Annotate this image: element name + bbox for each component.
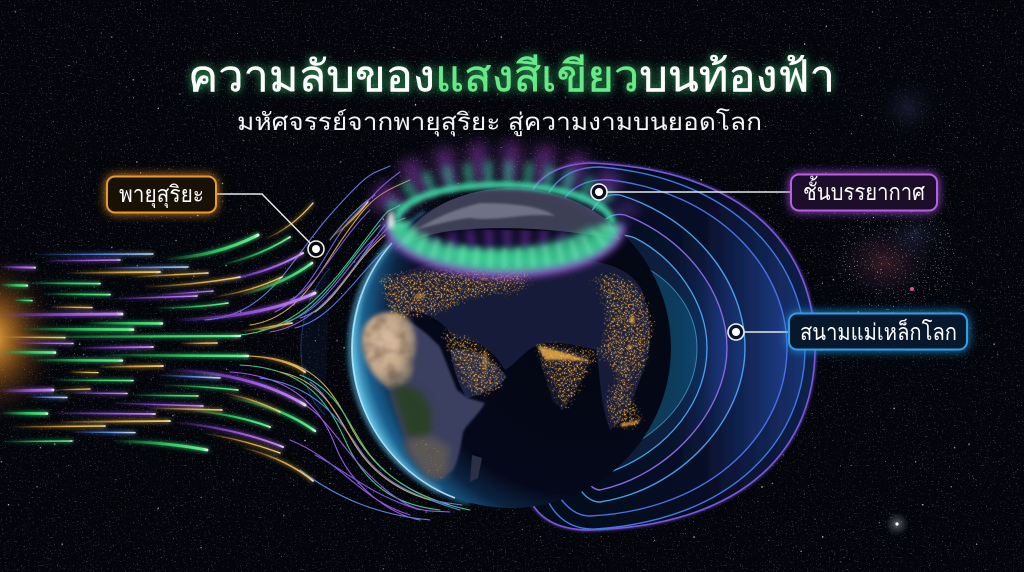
aurora outer purple xyxy=(387,220,620,274)
leader line xyxy=(217,194,316,249)
aurora curtains: green rays xyxy=(398,171,611,215)
callout: atmosphere xyxy=(591,174,937,210)
label box xyxy=(791,174,937,210)
city lights xyxy=(378,266,656,480)
leader line xyxy=(607,191,791,193)
aurora ring xyxy=(387,161,621,274)
label box xyxy=(789,314,967,350)
globe: earth at night xyxy=(349,188,671,508)
polar cap light patch xyxy=(417,203,555,229)
aurora curtains: purple high xyxy=(392,161,617,214)
aurora left hot spot xyxy=(388,211,394,229)
soft haze on the left limb xyxy=(352,243,440,491)
leader line xyxy=(743,331,789,333)
callout: solar storm xyxy=(107,176,324,257)
aurora interior green sickle xyxy=(454,227,596,257)
outer atmosphere glow xyxy=(349,212,470,503)
bright city regions xyxy=(415,293,640,427)
callout: magnetic field xyxy=(728,314,967,350)
bright left limb xyxy=(352,243,455,498)
label text: พายุสุริยะ xyxy=(119,181,204,208)
label text: ชั้นบรรยากาศ xyxy=(803,176,925,205)
Africa grey land xyxy=(370,315,485,480)
aurora front green band xyxy=(396,220,611,264)
earth sphere xyxy=(351,188,671,508)
nebula: milky way right xyxy=(835,212,955,310)
node marker xyxy=(591,184,607,200)
sun glow at left edge xyxy=(0,246,64,430)
Arabia xyxy=(450,349,507,398)
title: ความลับของ แสงสีเขียวบนท้องฟ้า xyxy=(188,53,835,101)
bright star lower right xyxy=(885,512,909,536)
node marker xyxy=(728,324,744,340)
solar wind streaks xyxy=(0,202,368,481)
Sahara mottling xyxy=(362,312,416,388)
Madagascar xyxy=(470,455,482,482)
landmasses xyxy=(362,188,650,482)
label text: สนามแม่เหล็กโลก xyxy=(800,317,957,345)
label box xyxy=(107,176,216,212)
polar cap grey land xyxy=(395,188,620,250)
southern Africa xyxy=(405,436,450,480)
subtitle: มหัศจรรย์จากพายุสุริยะ สู่ความงามบนยอดโลก xyxy=(237,108,762,137)
node marker xyxy=(308,241,324,257)
aurora back band xyxy=(397,183,613,224)
aurora striations xyxy=(401,222,606,260)
vegetation belt xyxy=(392,385,432,438)
aurora interior dark purple curtains xyxy=(432,237,585,253)
faint bow shock left xyxy=(301,268,330,415)
nebula: upper right xyxy=(870,70,946,146)
Eurasia dark land xyxy=(385,258,650,430)
solar wind field lines xyxy=(205,166,470,520)
magnetic field rings xyxy=(530,163,815,530)
India land xyxy=(537,345,590,410)
Sahara xyxy=(362,312,416,388)
